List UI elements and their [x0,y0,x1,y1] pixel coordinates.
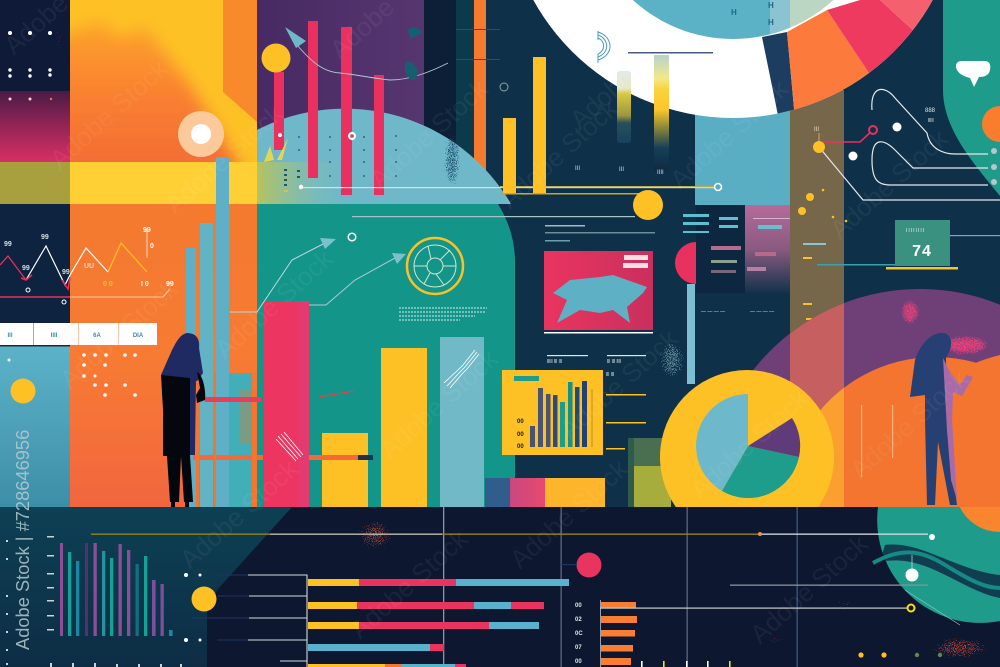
bottom panel: teal wedge [0,507,292,667]
card: value 74: IIIIIIII [906,228,925,234]
labels on zigzag chart: I 0 [141,281,149,288]
watermark: repeated stock text: Adobe Stock [664,73,794,194]
watermark: repeated stock text: Adobe Stock [744,528,874,649]
panel: dark table and pink sub panel [683,205,790,315]
text block under map: lll lll [606,372,614,378]
bar chart: fading bars over donut: III [619,167,624,173]
card: value 74: 74 [912,243,932,260]
labels on zigzag chart [4,227,174,304]
panel: top left navy dots [0,0,70,91]
labels on zigzag chart: 0 [150,243,154,250]
panel: left navy chart background [0,204,70,324]
panel: orange and yellow block [70,0,257,162]
icon: circular gauge [407,238,463,294]
watermark: repeated stock text: Adobe Stock [44,53,174,174]
watermark: repeated stock text: Adobe Stock [364,73,494,194]
grid lines [443,507,798,667]
watermark: repeated stock text: Adobe Stock [684,383,814,504]
card: yellow bar chart: 00 [517,419,524,425]
watermark: repeated stock text: Adobe Stock [159,98,289,219]
bars: red bars on purple [274,21,384,195]
panel: teal main block [257,204,515,507]
panel: blue dome [257,109,511,204]
watermark: repeated stock text: Adobe Stock [824,123,954,244]
panel: maroon gradient block [0,91,70,162]
labels on zigzag chart: 99 [4,241,12,248]
speckle: red cloud bottom right [924,636,996,660]
markers on dome [264,132,397,192]
red connector with nodes: III [814,127,819,133]
speckle near pole [656,336,688,384]
table: white header strip [0,323,157,346]
line and node: lower right rules [600,584,928,612]
panel: lower orange block [70,204,257,507]
tree connector lines [184,573,307,667]
bottom panel: navy base [0,507,1000,667]
watermark: repeated stock text: Adobe Stock [209,243,339,364]
background: dark navy-teal field [424,0,1000,507]
line chart: circuit curves [819,89,1000,200]
panel: olive and yellow band [0,162,347,204]
label: small H marks: H [768,18,774,27]
bar chart: orange bars with labels: 00 [575,603,582,609]
card: yellow bar chart: 00 [517,432,524,438]
icon: blue arc glyph [598,31,610,63]
watermark: repeated stock text: Adobe [564,62,640,134]
icon: speech bubble [956,61,990,87]
circle: yellow on blue [10,378,36,404]
text lines above map [545,225,655,242]
bar chart: orange bars with labels: 0C [575,631,583,637]
orange dome [818,355,1000,507]
bar chart: blue growth bars and lattice [186,157,263,507]
bar chart: fading bars over donut [575,55,669,176]
purple dome [753,289,1000,410]
panel: lower left blue block [0,345,70,507]
panel: purple block [257,0,424,204]
label: small H marks: H [768,1,774,10]
labels on zigzag chart: 99 [166,281,174,288]
card: yellow bar chart [502,370,603,455]
dot matrix [8,353,137,397]
icon: teal leaf shapes [405,27,422,80]
line chart: left zigzag [0,230,170,297]
bar chart: orange bars with labels: 07 [575,645,582,651]
circles: yellow and pink bottom markers [192,552,602,612]
watermark: repeated stock text: Adobe Stock [844,363,974,484]
panel: dark strips [424,0,500,204]
bar chart: fading bars over donut: IIII [657,170,664,176]
labels on zigzag chart: 99 [41,234,49,241]
bar chart: orange bars with labels [575,600,637,667]
labels on zigzag chart: 0 0 [103,281,113,288]
watermark: repeated stock text: Adobe Stock [54,273,184,394]
text block under map: lllll lll lll [547,359,562,365]
label: small H marks [731,1,774,27]
labels on zigzag chart: UU [84,263,94,270]
text block under map: lll lll llll [607,359,621,365]
person: standing right [910,333,973,505]
table: white header strip: 6A [93,333,102,339]
card: yellow bar chart: 00 [517,444,524,450]
table: white header strip: III [7,333,13,339]
arrow: upward trend one [230,238,336,312]
panel: translucent brown column [790,90,844,507]
labels on zigzag chart: 99 [22,265,30,272]
red connector with nodes: 888 [925,108,936,114]
watermark: repeated stock text: Adobe Stock [504,453,634,574]
pink half circle on pole [675,242,696,384]
yellow dots and dashes on brown column [798,189,847,320]
bar chart: yellow bars [503,57,546,193]
label: small H marks: H [731,8,737,17]
text block: dotted caption [399,308,487,320]
teal blob with wave [873,507,1000,625]
arrow: light blue curved pointer [285,27,448,80]
card: value 74 [817,220,1000,270]
pie chart in yellow ring [660,370,834,507]
text block under map [547,355,646,378]
red connector with nodes [813,108,997,185]
watermark: repeated stock text: Adobe Stock [174,453,304,574]
table: white header strip: IIII [51,333,58,339]
red connector with nodes: lllll [928,118,934,124]
bar chart: slim purple and teal bars [60,543,173,636]
watermark: repeated stock text: Adobe Stock [344,523,474,644]
line: long yellow and white rule [91,532,935,540]
speckle: bottom space textures [353,513,863,650]
panel: blue rectangle under donut [695,100,790,205]
axis ticks left of bars [6,536,182,667]
ring node on teal [348,233,356,241]
panel: big donut chart [533,0,933,118]
person: standing left [161,333,205,507]
watermark: repeated stock text: Adobe Stock [554,323,684,444]
bar chart: orange bars with labels: 02 [575,617,582,623]
icon: white hatch marks [276,350,479,461]
table: white header strip: DIA [133,333,144,339]
line: navy rule on white [628,52,713,54]
panel: dark table and pink sub panel: — — — — [750,309,774,315]
watermark: repeated stock text: Adobe Stock [494,93,624,214]
labels on zigzag chart: 99 [143,227,151,234]
bar chart: pink and yellow columns [264,301,484,507]
panel: dark table and pink sub panel: — — — — [701,309,725,315]
teal circuit panel on right [943,0,1000,196]
arrow: upward trend two [309,253,406,305]
circle: yellow marker [262,44,290,72]
icon: white target circle [178,111,224,157]
yellow rules beside card [606,394,646,450]
orange semi circle [982,106,1000,142]
panel: colour strip at base [485,478,605,507]
node: ring and yellow circle on rules [500,83,722,220]
bar chart: fading bars over donut: III [575,166,580,172]
watermark: repeated stock text: Adobe Stock [374,343,504,464]
labels on zigzag chart: 99 [62,269,70,276]
map panel [544,251,653,334]
vertical watermark label: Adobe Stock | #728646956 [12,430,33,650]
dots at bottom right [641,652,942,667]
bar chart: orange bars with labels: 00 [575,659,582,665]
small green squares [628,438,671,507]
bar chart: stacked horizontal bars [308,579,569,667]
long rules across centre [299,185,715,217]
donut: inner blue circle [633,0,833,39]
